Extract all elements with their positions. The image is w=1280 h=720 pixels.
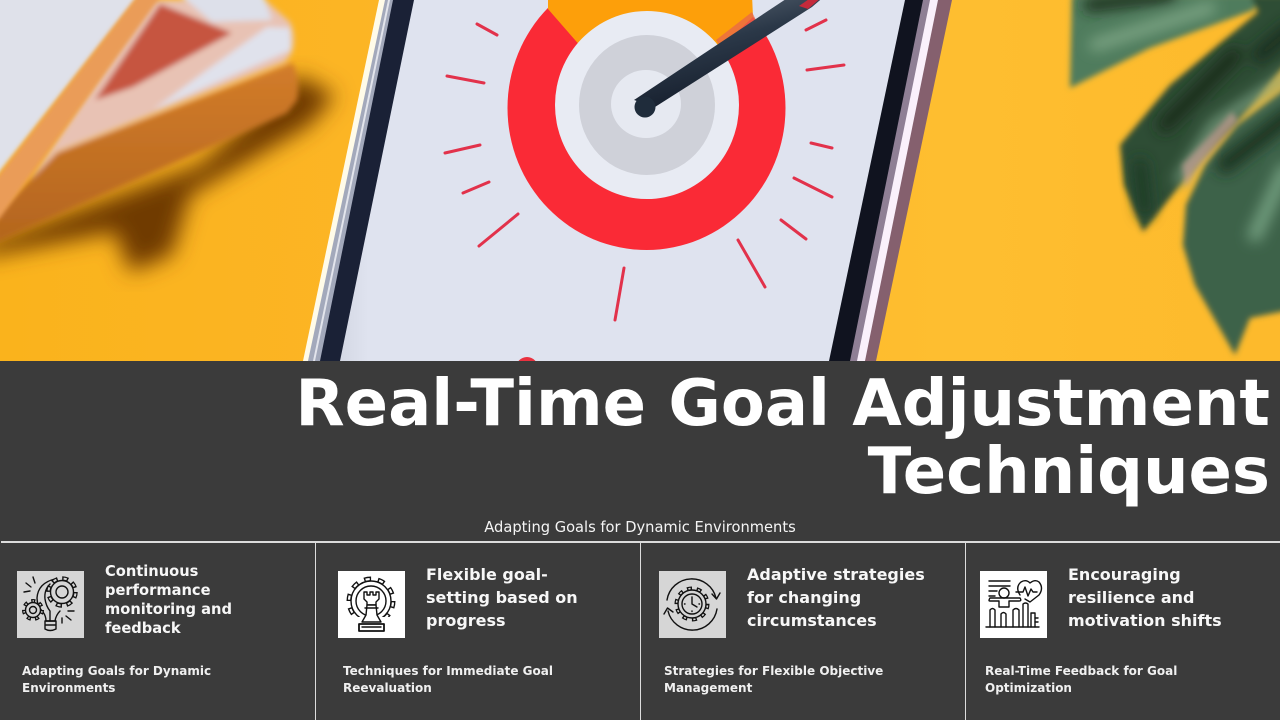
radial ticks [445,20,844,320]
heading: Adaptive strategies [747,565,925,584]
caption: Management [664,681,752,695]
heading: resilience and [1068,588,1195,607]
caption: Adapting Goals for Dynamic [22,664,211,678]
heading [426,565,578,630]
icon: clock gear with cycle arrows [659,571,726,638]
caption: Techniques for Immediate Goal [343,664,553,678]
heading: for changing [747,588,861,607]
caption [664,664,883,695]
heading [105,563,232,637]
leaves [1070,0,1280,355]
heading: Flexible goal- [426,565,548,584]
caption [22,664,211,695]
caption: Strategies for Flexible Objective [664,664,883,678]
heading: motivation shifts [1068,611,1222,630]
heading [1068,565,1222,630]
heading: monitoring and [105,601,232,618]
panel: flexible goal-setting [338,565,578,695]
icon: chess rook in gear [338,571,405,638]
heading: progress [426,611,506,630]
heading: feedback [105,620,181,637]
title: Techniques [868,435,1270,509]
caption [985,664,1177,695]
title: Real-Time Goal Adjustment [295,367,1270,441]
heading: Continuous [105,563,198,580]
book shadow [0,75,335,272]
heading: Encouraging [1068,565,1181,584]
needle [634,0,826,118]
panel: continuous performance monitoring [17,563,232,695]
subtitle: Adapting Goals for Dynamic Environments [484,519,796,536]
icon: light bulb with gears [17,571,84,638]
hero photo: phone with target on yellow background [0,0,1280,361]
caption: Real-Time Feedback for Goal [985,664,1177,678]
caption: Reevaluation [343,681,432,695]
heading [747,565,925,630]
icon: person, heart and bars [980,571,1047,638]
phone body [303,0,386,361]
heading: setting based on [426,588,578,607]
book [0,0,298,243]
heading: performance [105,582,211,599]
panel: encouraging resilience [980,565,1222,695]
heading: circumstances [747,611,877,630]
panel: adaptive strategies [659,565,925,695]
caption: Optimization [985,681,1072,695]
caption [343,664,553,695]
title [295,367,1270,509]
target [508,0,786,250]
caption: Environments [22,681,115,695]
